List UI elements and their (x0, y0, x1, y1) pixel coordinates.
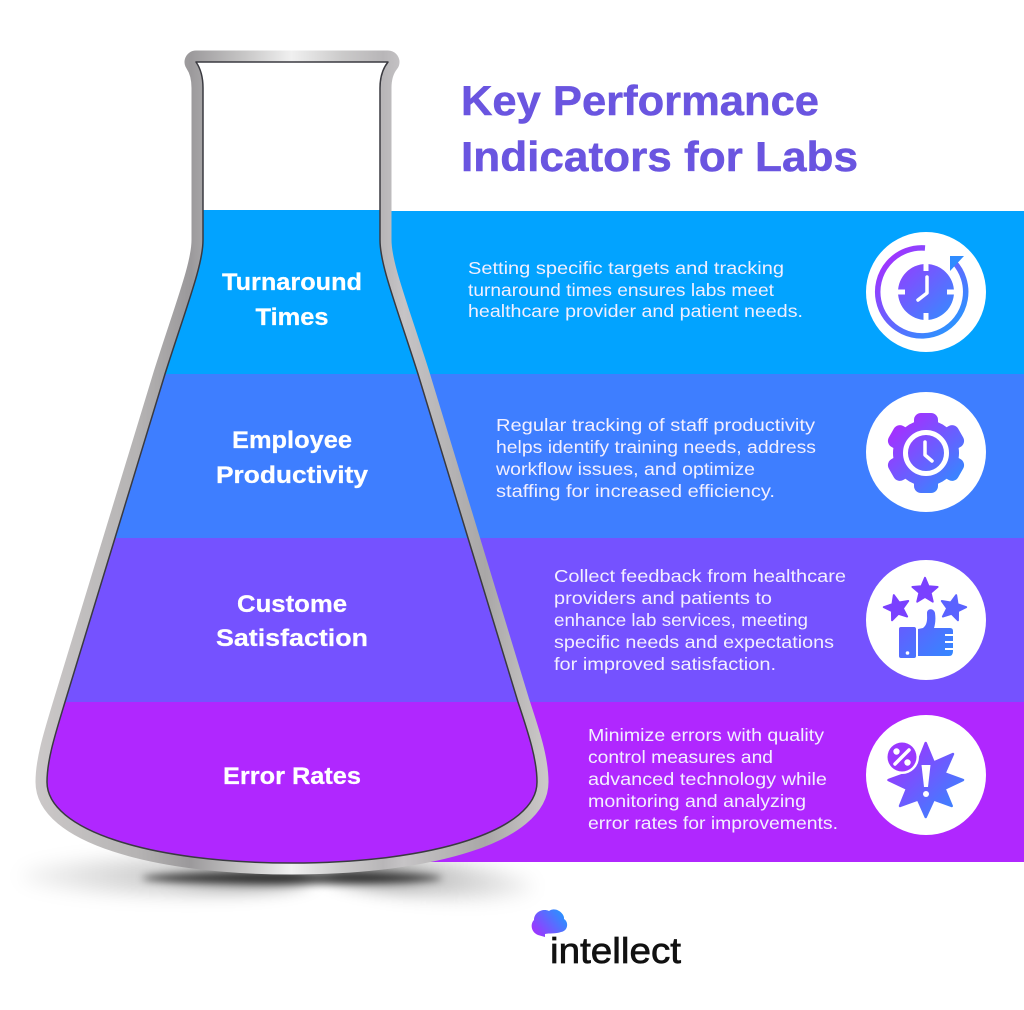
flask labels: Turnaround (222, 269, 362, 296)
flask labels: Error Rates (223, 763, 361, 790)
flask labels: Productivity (216, 462, 369, 489)
logo cloud (532, 909, 567, 937)
flask liquid layers (48, 210, 536, 862)
text: error rates: Minimize errors with quality (588, 725, 824, 745)
text: customer satisfaction: specific needs and expectations (554, 632, 834, 652)
text: turnaround times (468, 258, 803, 321)
flask labels (216, 269, 369, 790)
text: customer satisfaction: enhance lab services, meeting (554, 610, 808, 630)
laboratory flask (36, 50, 548, 874)
flask ground shadow (20, 852, 536, 904)
text: customer satisfaction: Collect feedback from healthcare (554, 566, 846, 586)
flask labels: Times (256, 304, 328, 331)
text: employee productivity: staffing for increased efficiency. (496, 481, 775, 501)
title: Key Performance (461, 77, 819, 124)
text: employee productivity (495, 415, 816, 501)
text: employee productivity: workflow issues, and optimize (495, 459, 755, 479)
title (461, 77, 858, 180)
text: turnaround times: Setting specific targets and tracking (468, 258, 784, 278)
flask labels: Satisfaction (216, 625, 368, 652)
flask glass wall (47, 62, 537, 863)
icon: alert burst with percent badge (866, 715, 986, 835)
icon: gear with clock (866, 392, 986, 512)
text: employee productivity: Regular tracking of staff productivity (496, 415, 815, 435)
text: employee productivity: helps identify training needs, address (496, 437, 816, 457)
flask labels: Custome (237, 591, 347, 618)
logo: intellect (532, 909, 681, 971)
text: error rates (588, 725, 838, 833)
text: customer satisfaction (554, 566, 846, 674)
text: error rates: error rates for improvements. (588, 813, 838, 833)
text: error rates: control measures and (588, 747, 773, 767)
text: turnaround times: turnaround times ensures labs meet (468, 280, 774, 300)
title: Indicators for Labs (461, 133, 858, 180)
text: turnaround times: healthcare provider and patient needs. (468, 301, 803, 321)
text: error rates: monitoring and analyzing (588, 791, 806, 811)
icon: stars and thumbs up (866, 560, 986, 680)
flask labels: Employee (232, 427, 352, 454)
right side colour bands (292, 211, 1024, 862)
text: customer satisfaction: for improved satisfaction. (554, 654, 776, 674)
text: error rates: advanced technology while (588, 769, 827, 789)
text: customer satisfaction: providers and patients to (554, 588, 772, 608)
flask inner outline (47, 62, 537, 863)
logo: intellect: intellect (550, 930, 681, 971)
icon: clock with circular arrow (866, 232, 986, 352)
